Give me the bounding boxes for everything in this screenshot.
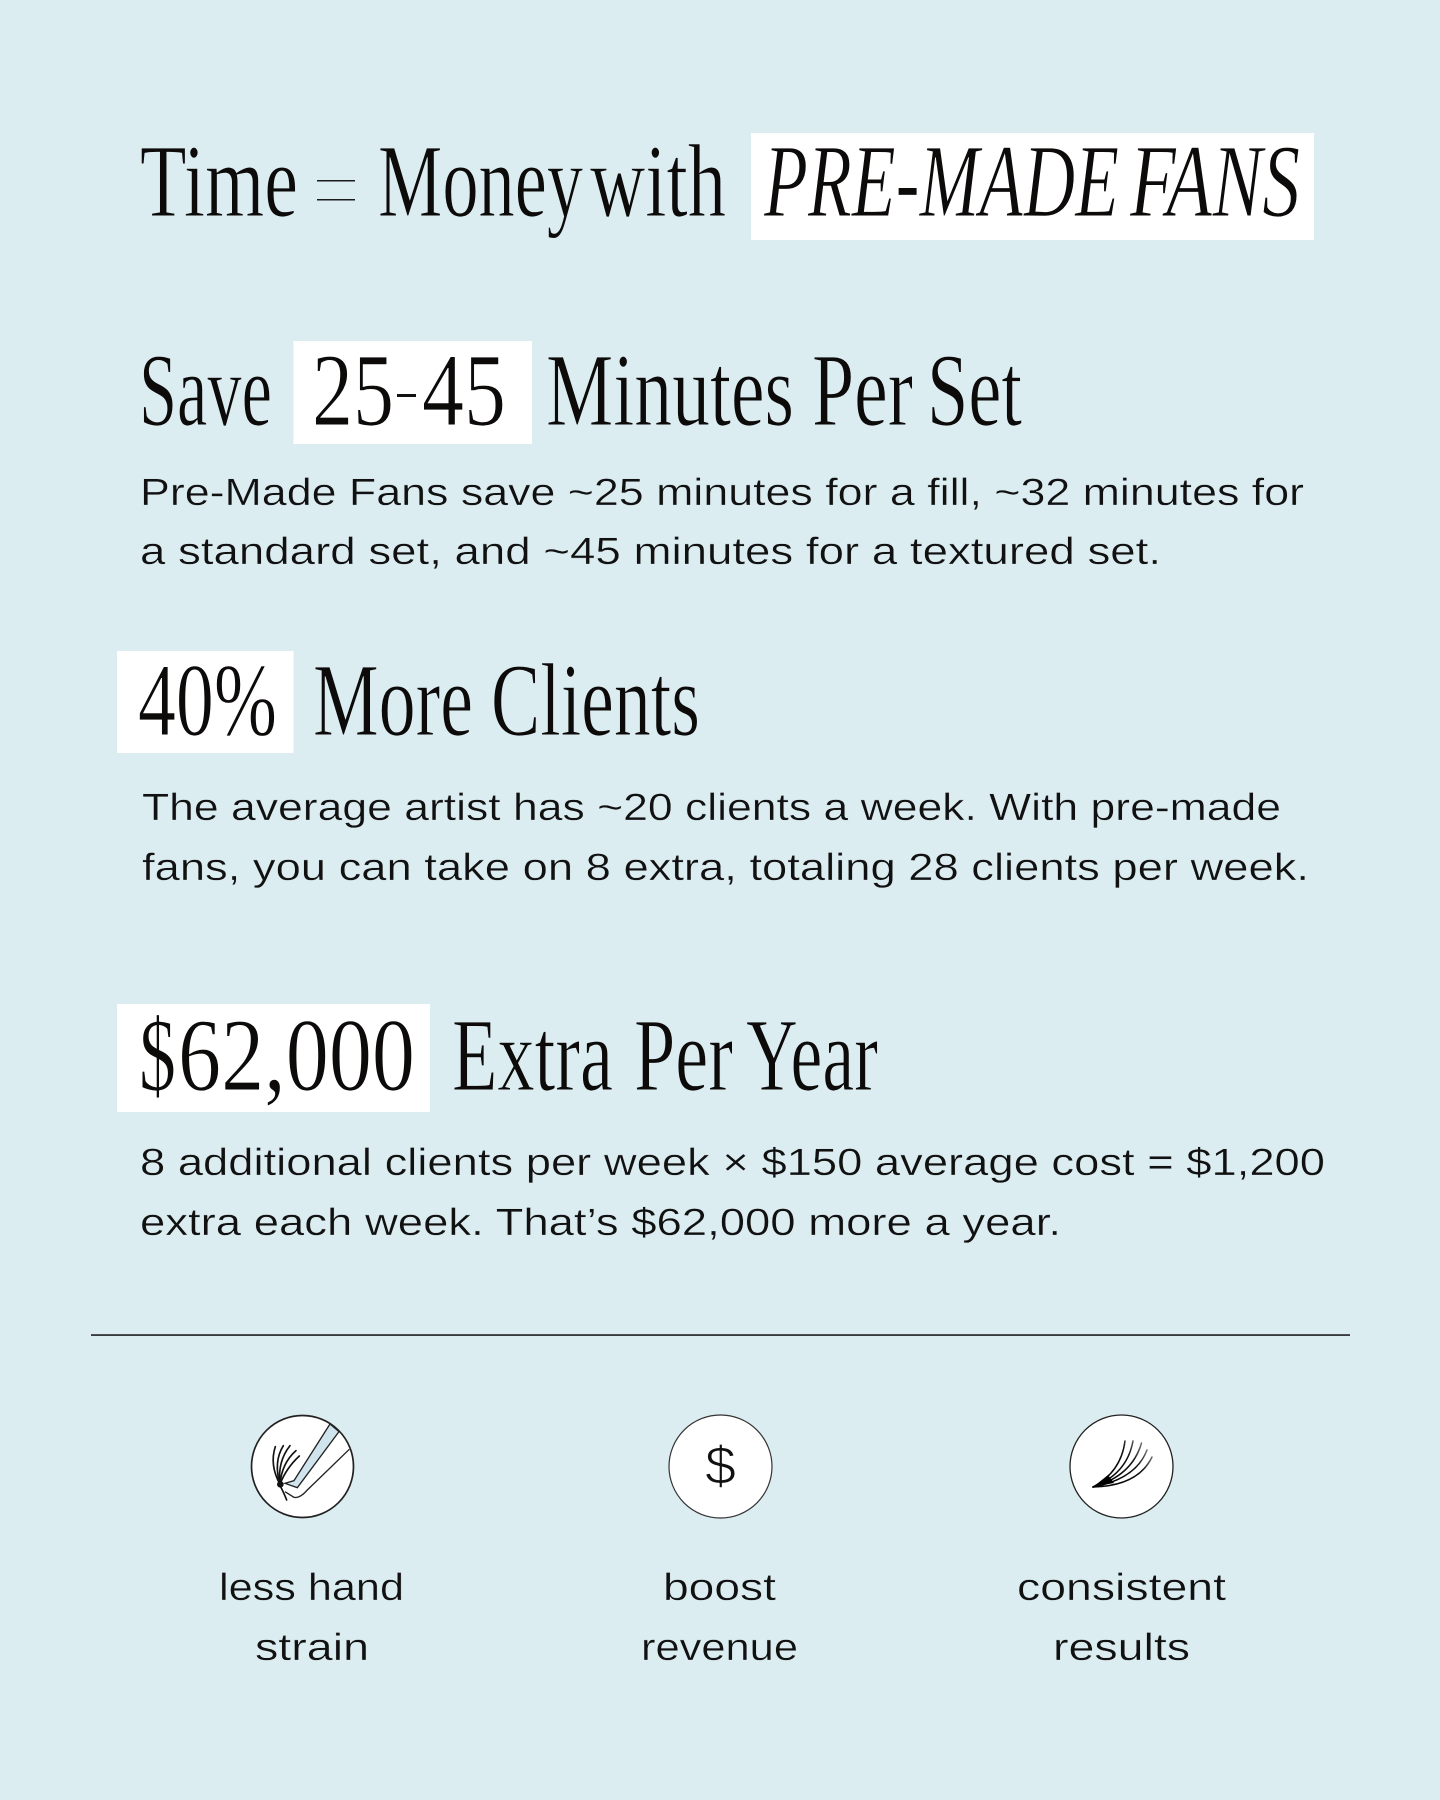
heading: $62,000 extra per year: 62,000 — [178, 998, 415, 1113]
heading: save 25-45 minutes: 45 — [422, 333, 506, 448]
label: less hand strain — [219, 1567, 404, 1669]
heading: save 25-45 minutes — [139, 333, 1022, 448]
text block: extra per year: 8 additional clients per week × $150 average cost = $1,200 — [140, 1142, 1325, 1184]
panel: more clients — [117, 643, 1309, 889]
text block: save minutes: Pre-Made Fans save ~25 minutes for a fill, ~32 minutes for — [140, 472, 1304, 514]
label: consistent results: consistent — [1017, 1567, 1227, 1609]
icon: dollar sign — [669, 1415, 772, 1518]
label: boost revenue — [641, 1567, 798, 1669]
title: Time — [140, 124, 298, 239]
heading: $62,000 extra per year: $ — [139, 998, 176, 1113]
title: Money — [378, 124, 583, 239]
icon: lash fan — [1070, 1415, 1173, 1518]
panel: save minutes — [139, 333, 1304, 573]
label: less hand strain: less hand — [219, 1567, 404, 1609]
heading: save 25-45 minutes: Save — [139, 333, 272, 448]
heading: save 25-45 minutes: Minutes — [546, 333, 794, 448]
benefit: boost revenue — [641, 1415, 798, 1669]
text block: extra per year — [140, 1142, 1325, 1244]
benefit: consistent results — [1017, 1415, 1227, 1669]
text block: more clients: fans, you can take on 8 extra, totaling 28 clients per week. — [142, 847, 1309, 889]
icon: tweezers with lash fan — [252, 1416, 354, 1518]
text block: save minutes — [140, 472, 1304, 573]
heading: 40% more clients: 40% — [138, 643, 277, 758]
text block: more clients: The average artist has ~20 clients a week. With pre-made — [142, 787, 1281, 829]
label: less hand strain: strain — [255, 1627, 369, 1669]
heading: 40% more clients — [117, 643, 700, 758]
label: consistent results — [1017, 1567, 1227, 1669]
title: with — [590, 124, 726, 239]
heading: $62,000 extra per year: Extra — [452, 998, 613, 1113]
heading: save 25-45 minutes: Per — [812, 333, 913, 448]
text block: more clients — [142, 787, 1309, 889]
heading: save 25-45 minutes: Set — [927, 333, 1022, 448]
heading: $62,000 extra per year: Year — [746, 998, 878, 1113]
text block: extra per year: extra each week. That’s $62,000 more a year. — [140, 1202, 1061, 1244]
title — [140, 124, 1314, 240]
heading: save 25-45 minutes: 25 — [312, 333, 394, 448]
heading: $62,000 extra per year: Per — [634, 998, 733, 1113]
label: consistent results: results — [1053, 1627, 1190, 1669]
text block: save minutes: a standard set, and ~45 minutes for a textured set. — [140, 531, 1161, 573]
benefit: less hand strain — [219, 1416, 404, 1669]
heading: 40% more clients: More — [313, 643, 473, 758]
label: boost revenue: boost — [663, 1567, 777, 1609]
icon: dollar sign: $ — [705, 1436, 736, 1496]
heading: 40% more clients: Clients — [491, 643, 700, 758]
panel: extra per year — [117, 998, 1325, 1244]
title: FANS — [1129, 124, 1300, 239]
title: PRE-MADE — [763, 124, 1119, 239]
heading: $62,000 extra per year — [117, 998, 878, 1113]
label: boost revenue: revenue — [641, 1627, 798, 1669]
